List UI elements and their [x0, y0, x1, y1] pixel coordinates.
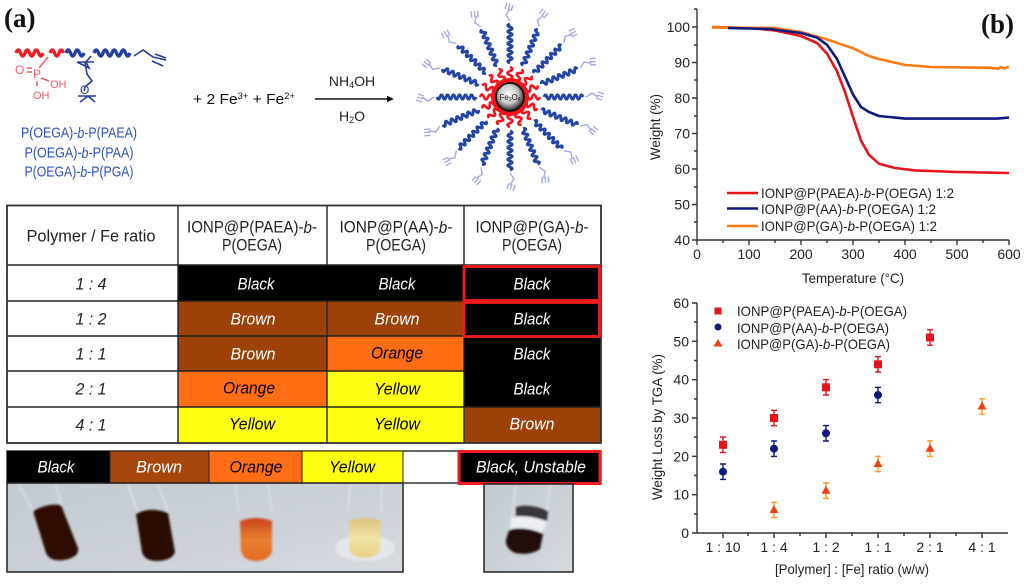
- x tick labels: 300: [841, 246, 865, 262]
- x axis title: [Polymer] : [Fe] ratio (w/w): [775, 561, 929, 577]
- bright reflections beneath pale vials: [335, 535, 395, 561]
- iron reagents: + Fe: [248, 91, 284, 108]
- OEGA oxygen: O: [80, 83, 89, 97]
- table cell labels: Black: [514, 274, 552, 294]
- ratio row labels: 1 : 2: [76, 310, 107, 328]
- x tick labels: 400: [893, 246, 917, 262]
- table cell labels: Yellow: [374, 380, 422, 398]
- vial glass walls: [18, 484, 382, 512]
- x category labels: 1 : 1: [864, 539, 892, 555]
- table cell labels: Yellow: [229, 414, 277, 434]
- colour table: [7, 205, 601, 443]
- vial photo: unstable: [484, 484, 573, 572]
- table headers: IONP@P(AA)-b-: [340, 218, 452, 236]
- anchoring red block: [480, 67, 540, 127]
- table cell labels: [223, 274, 554, 434]
- table cell labels: Orange: [371, 344, 423, 362]
- red polymer block: [16, 50, 64, 56]
- table headers: IONP@P(PAEA)-b-: [187, 218, 317, 236]
- nanoparticle diagram: [416, 3, 604, 191]
- legend: [727, 185, 954, 234]
- reaction arrow with conditions: [315, 73, 394, 125]
- legend: [714, 303, 907, 352]
- table cell labels: Black: [514, 380, 552, 398]
- colour legend strip: Black: [38, 458, 76, 476]
- x tick labels: [693, 246, 1021, 262]
- table headers: [26, 218, 588, 254]
- red highlight boxes: [464, 266, 600, 336]
- y tick labels: 10: [673, 487, 689, 503]
- orange curve: [712, 27, 1009, 69]
- x category labels: 4 : 1: [968, 539, 996, 555]
- panel label: (a): (a): [4, 3, 36, 33]
- colour legend strip: Orange: [230, 458, 282, 476]
- x tick labels: 100: [737, 246, 761, 262]
- y tick labels: 50: [674, 196, 690, 212]
- x tick labels: 500: [945, 246, 969, 262]
- table cell fills: [7, 205, 601, 443]
- iron oxide core: O: [512, 93, 518, 102]
- y tick labels: 40: [673, 372, 689, 388]
- y tick labels: 0: [681, 525, 689, 541]
- reaction arrow with conditions: 4: [349, 80, 354, 90]
- table cell labels: Black: [378, 274, 417, 294]
- y tick labels: [673, 295, 689, 541]
- legend: IONP@P(PAEA)-b-P(OEGA): [737, 303, 907, 319]
- x tick labels: 600: [997, 246, 1021, 262]
- OEGA side chain: [77, 56, 96, 102]
- y tick labels: 60: [674, 161, 690, 177]
- table headers: P(OEGA): [366, 236, 426, 254]
- phosphonic acid side group: [15, 57, 67, 102]
- phosphonic acid side group: OH: [33, 90, 50, 102]
- legend: IONP@P(AA)-b-P(OEGA) 1:2: [761, 201, 936, 217]
- table headers: IONP@P(GA)-b-: [476, 218, 588, 236]
- colour legend strip: [7, 451, 601, 484]
- phosphonic acid side group: OH: [50, 79, 67, 91]
- x tick labels: 0: [693, 246, 701, 262]
- polymer names: [21, 124, 137, 180]
- x category labels: 1 : 4: [760, 539, 788, 555]
- blue curve: [728, 28, 1009, 119]
- polymer names: P(OEGA)-b-P(PGA): [24, 164, 134, 180]
- phosphonic acid side group: P: [33, 67, 41, 81]
- red curve: [712, 27, 1009, 173]
- reaction arrow with conditions: 2: [349, 115, 354, 125]
- y tick labels: 30: [673, 410, 689, 426]
- y tick labels: [667, 19, 690, 248]
- table cell labels: Brown: [230, 310, 276, 328]
- table cell labels: Brown: [374, 310, 420, 328]
- reaction arrow with conditions: OH: [354, 73, 375, 89]
- reaction arrow with conditions: H: [339, 108, 349, 124]
- y tick labels: 40: [674, 232, 690, 248]
- orange series: P(GA): [770, 399, 986, 518]
- table cell labels: Brown: [510, 414, 554, 434]
- polymer names: P(OEGA)-b-P(PAA): [24, 144, 134, 162]
- phosphonic acid side group: O: [15, 63, 24, 77]
- table headers: P(OEGA): [222, 236, 282, 254]
- x tick labels: 200: [789, 246, 813, 262]
- y tick labels: 90: [674, 54, 690, 70]
- x category labels: 1 : 10: [705, 539, 741, 555]
- alkyne end group: [134, 50, 166, 66]
- y tick labels: 50: [673, 333, 689, 349]
- iron oxide core: 4: [518, 97, 521, 103]
- y tick labels: 100: [667, 19, 690, 35]
- ratio row labels: [75, 274, 107, 434]
- iron reagents: 2+: [284, 91, 295, 101]
- y tick labels: 80: [674, 90, 690, 106]
- y axis title: Weight Loss by TGA (%): [649, 354, 665, 500]
- table headers: P(OEGA): [502, 236, 562, 254]
- x axis title: Temperature (°C): [802, 270, 904, 286]
- red series: P(PAEA): [719, 330, 934, 453]
- iron reagents: + 2 Fe: [193, 91, 236, 108]
- reaction arrow with conditions: O: [354, 108, 365, 124]
- legend: IONP@P(PAEA)-b-P(OEGA) 1:2: [761, 185, 954, 201]
- weight loss scatter chart: [649, 295, 1008, 577]
- table cell labels: Yellow: [374, 414, 422, 434]
- colour legend strip: Yellow: [329, 458, 377, 476]
- table headers: Polymer / Fe ratio: [26, 226, 156, 246]
- table cell labels: Brown: [230, 344, 276, 364]
- table cell labels: Orange: [223, 378, 275, 398]
- ratio row labels: 1 : 1: [76, 344, 106, 364]
- ratio row labels: 4 : 1: [76, 416, 106, 434]
- panel label: (b): (b): [981, 9, 1014, 39]
- table cell labels: Black: [238, 274, 276, 294]
- y tick labels: 20: [673, 448, 689, 464]
- colour legend strip: Black, Unstable: [476, 458, 586, 476]
- polymer structure scheme: [15, 50, 166, 102]
- reaction arrow with conditions: NH: [329, 73, 349, 89]
- colour legend strip: Brown: [136, 458, 182, 476]
- legend: IONP@P(GA)-b-P(OEGA) 1:2: [761, 218, 937, 234]
- y axis title: Weight (%): [647, 94, 663, 160]
- axes: [692, 9, 1009, 245]
- ratio row labels: 1 : 4: [76, 274, 106, 294]
- legend: IONP@P(GA)-b-P(OEGA): [737, 336, 890, 352]
- legend: IONP@P(AA)-b-P(OEGA): [737, 320, 889, 336]
- x category labels: 1 : 2: [812, 539, 840, 555]
- iron reagents: 3+: [238, 91, 248, 101]
- iron oxide core: Fe: [499, 93, 509, 102]
- vial photo: four colours: [7, 483, 403, 572]
- axes: [692, 303, 1008, 538]
- blue series: P(AA): [719, 387, 882, 479]
- iron oxide core: 3: [509, 97, 512, 103]
- y tick labels: 60: [673, 295, 689, 311]
- x category labels: [705, 539, 996, 555]
- table cell labels: Black: [514, 344, 552, 364]
- y tick labels: 70: [674, 126, 690, 142]
- x category labels: 2 : 1: [916, 539, 944, 555]
- polymer corona arms: [416, 3, 604, 191]
- table cell labels: Black: [514, 310, 552, 328]
- blue polymer block: [66, 50, 130, 56]
- ratio row labels: 2 : 1: [75, 380, 106, 398]
- polymer names: P(OEGA)-b-P(PAEA): [21, 124, 137, 142]
- TGA line chart: [647, 9, 1021, 286]
- iron oxide core: [496, 83, 524, 111]
